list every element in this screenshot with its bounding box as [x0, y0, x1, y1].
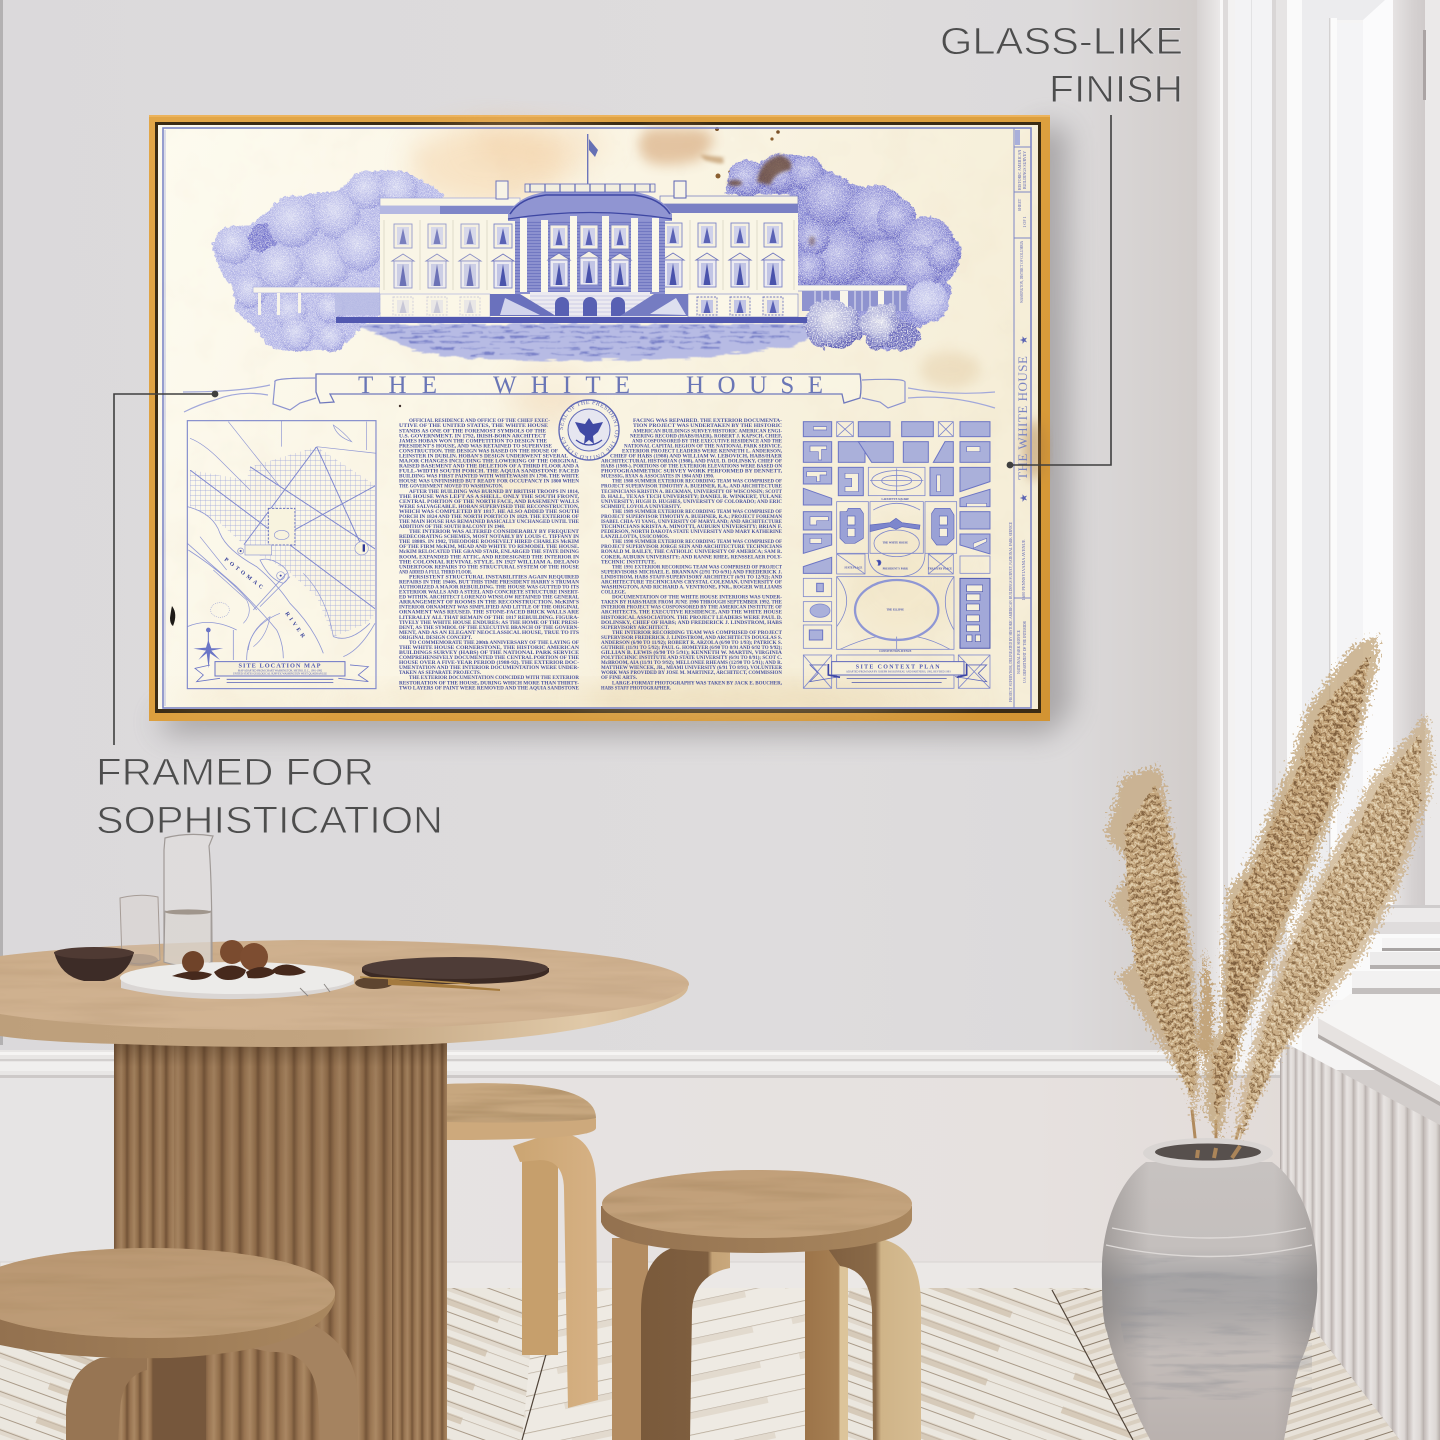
plan labels — [844, 498, 952, 653]
plan labels: THE ELLIPSE — [887, 609, 904, 612]
block cutouts — [807, 427, 987, 548]
body text, left column: AFTER THE BUILDING WAS BURNED BY BRITISH TROOPS IN 1814, — [409, 490, 580, 495]
body text, right column: ISABEL CHIA-YI YANG, UNIVERSITY OF MARYLAND; AND ARCHITECTURE — [601, 520, 783, 525]
dark wooden bowl — [54, 947, 134, 981]
title text — [358, 372, 823, 399]
body text, left column: RAISED BASEMENT AND THE DELETION OF A THIRD FLOOR AND A — [399, 465, 580, 470]
body text, right column: HISTORICAL ASSOCIATION. THE PROJECT LEADERS WERE PAUL D. — [601, 616, 782, 621]
body text, left column: JAMES HOBAN WON THE COMPETITION TO DESIGN THE — [399, 439, 548, 444]
map title ribbon: SITE LOCATION MAP — [238, 662, 321, 669]
lower wall panel — [0, 1078, 1290, 1290]
body text, right column: EXTERIOR PROJECT LEADERS WERE KENNETH L. ANDERSON, — [622, 449, 783, 454]
body text, left column: TAKEN AS SEPARATE PROJECTS. — [399, 671, 481, 676]
fluted pedestal — [114, 1030, 447, 1440]
callout label right: GLASS-LIKE — [940, 21, 1183, 63]
body text, right column: PROJECT SUPERVISOR TIMOTHY A. BUEHNER, R.A.; PROJECT FOREMAN — [601, 515, 782, 520]
river labels — [223, 557, 307, 642]
callout label left: FRAMED FOR — [96, 752, 374, 794]
star below name: ★ — [1019, 493, 1030, 502]
body text, left column: STANDS AS ONE OF THE FOREMOST SYMBOLS OF THE — [399, 429, 547, 434]
body text, left column: HOUSE WAS UNFINISHED BUT READY FOR OCCUPANCY IN 1800 WHEN — [399, 480, 579, 485]
river labels: RIVER — [283, 611, 307, 642]
portico staircases — [490, 294, 688, 316]
body text, left column: HOUSE OVER A FIVE-YEAR PERIOD (1988-92). THE EXTERIOR DOC- — [399, 661, 579, 666]
left stool left leg — [66, 1356, 147, 1440]
sheet number block: BUILDINGS SURVEY — [1022, 151, 1027, 189]
potomac river banks — [187, 507, 375, 660]
body text, right column: GUTHRIE (11/91 TO 5/92); PAUL G. HOMEYER (6/90 TO 8/91 AND 6/92 TO 9/92); — [601, 646, 782, 651]
window and trim — [1197, 0, 1440, 1070]
body text, left column: U.S. GOVERNMENT. IN 1792, IRISH-BORN ARCHITECT — [399, 434, 547, 439]
left stool centre leg — [153, 1350, 206, 1440]
body text, right column: UNIVERSITY; HUGH D. HUGHES, UNIVERSITY OF COLORADO; AND ERIC — [601, 500, 782, 505]
body text, right column: PEDERSON, NORTH DAKOTA STATE UNIVERSITY AND MARY KATHERINE — [601, 530, 783, 535]
leader line right — [1010, 115, 1111, 465]
body text, left column: EXTERIOR WALLS AND A STEEL AND CONCRETE STRUCTURE INSERT- — [399, 591, 579, 596]
baseboard — [0, 1262, 1130, 1290]
radiator — [1280, 1030, 1440, 1440]
body text, left column: THE COLONIAL REVIVAL STYLE. IN 1927 WILLIAM A. DELANO — [399, 560, 579, 565]
body text, left column: ORNAMENT WAS REUSED. THE STONE-FACED BRICK WALLS ARE — [399, 611, 580, 616]
body text, right column: THE 1991 EXTERIOR RECORDING TEAM WAS COMPRISED OF PROJECT — [612, 565, 783, 570]
body text, left column: PRESIDENT'S HOUSE, AND WAS RETAINED TO SUPERVISE — [399, 444, 553, 449]
vertical title block strip — [1009, 130, 1031, 702]
back stool — [447, 1083, 598, 1408]
vertical name: THE WHITE HOUSE — [1015, 356, 1030, 480]
body text, right column: GILLIAN B. LEWIS (6/90 TO 5/91); KENNETH W. MARTIN, VIRGINIA — [601, 651, 783, 656]
body text, right column: PROJECT SUPERVISOR TIMOTHY A. BUEHNER, R.A., AND ARCHITECTURE — [601, 485, 783, 490]
body text, left column: UMENTATION AND THE INTERIOR DOCUMENTATION WERE UNDER- — [399, 666, 579, 671]
leader dot right — [1007, 462, 1013, 468]
plume right wisps — [1233, 714, 1433, 1154]
plan labels: THE WHITE HOUSE — [883, 542, 908, 545]
body text, right column: RONALD M. BAILEY, THE CATHOLIC UNIVERSITY OF AMERICA; SAM R. — [601, 550, 782, 555]
body text, left column: AUTHORIZED A MAJOR REBUILDING. THE HOUSE WAS GUTTED TO ITS — [399, 586, 579, 590]
body text, left column: FULL-WIDTH SOUTH PORCH. THE AQUIA SANDSTONE FACED — [399, 470, 580, 475]
body text, left column: OF THE FIRM McKIM, MEAD AND WHITE TO REMODEL THE HOUSE. — [399, 545, 579, 550]
body text, left column: DENT, AS THE SYMBOL OF THE EXECUTIVE BRANCH OF THE GOVERN- — [399, 626, 579, 631]
dark serving plate — [362, 957, 549, 984]
title text: HOUSE — [686, 372, 823, 399]
body text, right column: THE 1989 SUMMER EXTERIOR RECORDING TEAM WAS COMPRISED OF — [612, 510, 782, 515]
nuts on the plate — [172, 940, 306, 980]
street grid — [190, 446, 375, 636]
plan labels: TREASURY PLACE — [928, 567, 952, 570]
chair rail — [0, 1050, 1290, 1078]
body text, right column: ARCHITECTS, THE EXECUTIVE RESIDENCE, AND THE WHITE HOUSE — [601, 611, 783, 616]
callout label left — [96, 752, 443, 842]
body text, right column: CHIEF OF HABS (1988) AND WILLIAM W. LEBOVICH, HABS/HAER — [610, 454, 783, 460]
delineators credit: PROJECT SUPERVISOR, DELINEATED BY HISTORIC AMERICAN BUILDINGS SURVEY, NATIONAL PARK SERVICE — [1009, 521, 1014, 702]
vase body — [1102, 1162, 1317, 1440]
river labels: POTOMAC — [223, 557, 266, 593]
right colonnade — [797, 285, 907, 311]
body text, left column: TO COMMEMORATE THE 200th ANNIVERSARY OF THE LAYING OF — [409, 641, 579, 646]
plan labels: PRESIDENT'S PARK — [883, 567, 909, 570]
body text, right column: THE 1988 SUMMER EXTERIOR RECORDING TEAM WAS COMPRISED OF — [612, 480, 782, 485]
body text, left column: LITERALLY ALL THAT REMAIN OF THE 1817 REBUILDING. FIGURA- — [399, 616, 579, 621]
body text, left column: TWO LAYERS OF PAINT WERE REMOVED AND THE AQUIA SANDSTONE — [399, 686, 580, 691]
plan title ribbon: ADAPTED FROM MAP BY JOSEPH PASSONNEAU AND PARTNERS, 1992, REVISED 1993 — [846, 670, 951, 673]
city blocks — [803, 422, 990, 640]
body text, left column: RESTORATION OF THE HOUSE, DURING WHICH MORE THAN THIRTY- — [399, 681, 579, 686]
gold frame — [149, 115, 1050, 721]
body text, right column: HABS STAFF PHOTOGRAPHER. — [601, 686, 671, 691]
left colonnade — [253, 287, 380, 315]
base terrace band — [336, 317, 807, 323]
body text, left column: ROOM, EXPANDED THE ATTIC, AND REDESIGNED THE INTERIOR IN — [399, 555, 580, 560]
body text, right column: WORK WAS PROVIDED BY JOSE M. MARTINEZ, ARCHITECT, COMMISSION — [601, 671, 782, 676]
body text, left column: PORCH IN 1824 AND THE NORTH PORTICO IN 1829. THE EXTERIOR OF — [399, 515, 579, 520]
plume left wisps — [1105, 766, 1200, 1123]
body text, left column: CENTRAL PORTION OF THE NORTH FACE, AND BASEMENT WALLS — [399, 500, 579, 505]
wooden herringbone floor — [0, 1288, 1440, 1440]
body text, right column: TAKEN BY HABS/HAER FROM JUNE 1990 THROUGH SEPTEMBER 1992. THE — [601, 601, 783, 606]
outlined parks and streets — [803, 422, 990, 688]
body text, left column: ED WITHIN. ARCHITECT LORENZO WINSLOW RETAINED THE GENERAL — [399, 596, 580, 601]
leader dot left — [212, 391, 218, 397]
vase rim — [1143, 1138, 1273, 1168]
window ledge and books — [1302, 905, 1440, 1000]
body text, left column: OFFICIAL RESIDENCE AND OFFICE OF THE CHIEF EXEC- — [409, 419, 550, 424]
body text, left column: CONSTRUCTION. THE DESIGN WAS BASED ON THE HOUSE OF — [399, 449, 558, 454]
right stool back legs — [612, 1238, 848, 1440]
central south portico — [508, 184, 672, 318]
body text, right column: INTERIOR PROJECT WAS COSPONSORED BY THE AMERICAN INSTITUTE OF — [601, 606, 782, 611]
body text, left column: MENT, AND AS AN ELEGANT NEOCLASSICAL HOUSE, TRUE TO ITS — [399, 631, 579, 636]
body text, left column: THE WHITE HOUSE CORNERSTONE, THE HISTORIC AMERICAN — [399, 646, 580, 651]
body text, left column: THE INTERIOR WAS ALTERED CONSIDERABLY BY FREQUENT — [409, 530, 580, 535]
pampas grass — [1105, 636, 1433, 1155]
body text, right column: SCHMIDT, LOYOLA UNIVERSITY. — [601, 505, 681, 510]
table surface — [0, 940, 689, 1030]
body text, right column: TECHNICIANS KRISTIN A. BECKMAN, UNIVERSITY OF WISCONSIN; SCOTT — [601, 490, 783, 495]
lawn — [352, 324, 842, 360]
body text, right column — [601, 419, 783, 691]
body text, left column: ARRANGEMENT OF ROOMS IN THE RECONSTRUCTION. McKIM'S — [399, 601, 579, 606]
leader line left — [114, 394, 215, 745]
body text, left column: UNDERTOOK REPAIRS TO THE STRUCTURAL SYSTEM OF THE HOUSE — [399, 565, 580, 570]
pampas stems — [1192, 1110, 1240, 1155]
upper diagonals — [190, 420, 377, 490]
body text, left column: BUILDINGS SURVEY (HABS) OF THE NATIONAL PARK SERVICE — [399, 651, 580, 656]
right wing facade — [660, 181, 798, 317]
table edge — [0, 984, 688, 1047]
plan title ribbon: SITE CONTEXT PLAN — [856, 664, 941, 670]
body text, right column: SUPERVISORY ARCHITECT. — [601, 626, 669, 631]
left wing facade — [380, 181, 520, 317]
plume left — [1125, 785, 1197, 1100]
site location map — [183, 420, 380, 689]
body text, right column: PROJECT SUPERVISOR JORGE SEIN AND ARCHITECTURE TECHNICIANS — [601, 545, 782, 550]
body text, right column: MUESSIG, RYAN & ASSOCIATES IN 1984 AND 1990. — [601, 475, 714, 480]
glass carafe with water — [164, 834, 213, 966]
left stool right leg — [241, 1318, 358, 1440]
body text, left column: WERE SALVAGEABLE. HOBAN SUPERVISED THE RECONSTRUCTION, — [399, 505, 580, 510]
district text: WASHINGTON, DISTRICT OF COLUMBIA — [1019, 241, 1025, 303]
star above name: ★ — [1019, 335, 1030, 344]
window sill — [1318, 994, 1440, 1106]
marble plate — [120, 962, 354, 999]
body text, right column: THE INTERIOR RECORDING TEAM WAS COMPRISED OF PROJECT — [612, 631, 783, 636]
body text, left column: ADDITION OF THE SOUTH BALCONY IN 1948. — [399, 525, 505, 530]
right bushes — [804, 300, 919, 350]
body text, left column: THE 1880S. IN 1902, THEODORE ROOSEVELT HIRED CHARLES McKIM — [399, 540, 579, 545]
body text, right column: DOCUMENTATION OF THE WHITE HOUSE INTERIORS WAS UNDER- — [612, 596, 782, 601]
sheet number block: SHEET — [1017, 198, 1022, 211]
body text, left column: BUILDING WAS FIRST PAINTED WITH WHITEWASH IN 1798. THE WHITE — [399, 475, 580, 480]
body text, left column: THE HOUSE WAS LEFT AS A SHELL. ONLY THE SOUTH FRONT, — [399, 495, 580, 500]
right stool front right leg — [826, 1240, 921, 1440]
callout label left: SOPHISTICATION — [96, 800, 443, 842]
body text, left column: McKIM RELOCATED THE GRAND STAIR, ENLARGED THE STATE DINING — [399, 550, 579, 555]
body text, right column: LARGE-FORMAT PHOTOGRAPHY WAS TAKEN BY JACK E. BOUCHER, — [612, 681, 783, 686]
title ribbon — [183, 372, 995, 412]
paper sheet — [158, 123, 1046, 716]
plan labels: CONSTITUTION AVENUE — [879, 650, 912, 653]
body text, left column: LEINSTER IN DUBLIN. HOBAN'S DESIGN UNDERWENT SEVERAL — [399, 454, 569, 460]
sheet number block: HISTORIC AMERICAN — [1017, 150, 1022, 190]
body text, right column: SUPERVISORS MICHAEL E. BRANNAN (2/91 TO 6/91) AND FREDERICK J. — [601, 570, 782, 575]
flag and pole — [587, 134, 598, 184]
plume right — [1240, 735, 1420, 1140]
framed print — [149, 110, 1052, 721]
body text, right column: AMERICAN BUILDINGS SURVEY/HISTORIC AMERICAN ENGI- — [633, 429, 782, 434]
rust stain on right tree — [728, 155, 815, 246]
body text, right column: PHOTOGRAMMETRIC SURVEY WORK PERFORMED BY DENNETT, — [601, 470, 783, 475]
left stool seat — [0, 1290, 335, 1358]
callout label right: FINISH — [1049, 69, 1183, 111]
body text, right column: MATTHEW WIENCEK, JR., MIAMI UNIVERSITY (6/91 TO 8/91). VOLUNTEER — [601, 666, 782, 671]
left trees — [212, 170, 443, 352]
address: 1600 PENNSYLVANIA AVENUE — [1021, 539, 1026, 600]
dark inner gap — [155, 122, 1041, 713]
body text, right column: OF FINE ARTS. — [601, 676, 637, 681]
trim bands — [1197, 0, 1302, 1050]
callout: glass-like finish — [940, 21, 1183, 468]
body text, right column: COKER, AUBURN UNIVERSITY; AND RANNE RHEE, RENSSELAER POLY- — [601, 555, 782, 560]
title text: THE — [358, 372, 437, 399]
body text, left column: THE EXTERIOR DOCUMENTATION COINCIDED WITH THE EXTERIOR — [409, 676, 579, 681]
golden spoons — [355, 977, 500, 991]
the ellipse — [855, 580, 938, 640]
plume centre — [1212, 655, 1370, 1120]
body text, right column: TION PROJECT WAS UNDERTAKEN BY THE HISTORIC — [633, 424, 783, 429]
body text, right column: FACING WAS REPAIRED. THE EXTERIOR DOCUMENTA- — [633, 419, 782, 424]
body text, right column: THE 1990 SUMMER EXTERIOR RECORDING TEAM WAS COMPRISED OF — [612, 540, 782, 545]
body text, right column: LANZILLOTTA, US/ICOMOS. — [601, 535, 669, 540]
right stool front left leg — [641, 1246, 730, 1440]
frame drop shadow — [155, 122, 1072, 735]
body text, right column: ANDERSON (6/90 TO 11/92); ROBERT R. ARZOLA (6/90 TO 1/93); PATRICK S. — [601, 641, 782, 646]
parks and white house block — [268, 508, 295, 545]
right building block — [960, 578, 990, 648]
body text, right column: LINDSTROM, HABS STAFF/SUPERVISORY ARCHITECT (6/91 TO 12/92); AND — [601, 575, 782, 580]
callout: framed for sophistication — [96, 391, 443, 842]
front right stool — [601, 1170, 921, 1440]
callout label right — [940, 21, 1183, 111]
back stool seat — [447, 1083, 596, 1140]
body text, right column: McBROOM, AIA (11/91 TO 9/92); MELLONEE RHEAMS (12/90 TO 5/91); AND R. — [601, 661, 782, 666]
body text, right column: AND COSPONSORED BY THE EXECUTIVE RESIDENCE AND THE — [632, 439, 783, 444]
body text, left column: UTIVE OF THE UNITED STATES, THE WHITE HOUSE — [399, 424, 549, 429]
body text, right column: ARCHITECTURAL HISTORIAN (1988), AND PAUL D. DOLINSKY, CHIEF OF — [601, 460, 782, 464]
body text, left column: THE GOVERNMENT MOVED TO WASHINGTON. — [399, 485, 503, 490]
body text, right column: NATIONAL CAPITAL REGION OF THE NATIONAL PARK SERVICE. — [624, 444, 782, 449]
small credits: NATIONAL PARK SERVICE — [1017, 629, 1021, 674]
body text, left column — [399, 419, 580, 691]
plume small centre — [1197, 950, 1213, 1058]
glass tumbler — [120, 895, 160, 966]
table top — [0, 940, 689, 1047]
body text, right column: ARCHITECTURE TECHNICIANS CRYSTAL COLEMAN, UNIVERSITY OF — [601, 580, 782, 586]
plan labels: LAFAYETTE SQUARE — [882, 498, 909, 501]
right trees — [725, 153, 962, 352]
back stool legs — [513, 1133, 598, 1408]
plume centre wisps — [1203, 636, 1378, 1138]
vertical title block strip: U.S. DEPARTMENT OF THE INTERIOR — [1023, 620, 1027, 683]
body text, right column: D. HALL, TEXAS TECH UNIVERSITY; DANIEL R. WINKERT, TULANE — [601, 495, 783, 500]
compass star — [193, 628, 223, 668]
plan labels: STATE PLACE — [844, 566, 863, 569]
front left stool — [0, 1248, 358, 1440]
window panes — [1302, 0, 1440, 1000]
body text, right column: POLYTECHNIC INSTITUTE AND STATE UNIVERSITY (6/91 TO 8/91); SCOT C. — [601, 656, 782, 661]
body text, left column: THE MAIN HOUSE HAS REMAINED BASICALLY UNCHANGED UNTIL THE — [399, 520, 580, 525]
presidential seal: SEAL OF THE PRESIDENT OF THE UNITED STATES — [560, 400, 618, 460]
title text: WHITE — [493, 372, 630, 399]
body text, right column: DOLINSKY, CHIEF OF HABS; AND FREDERICK J. LINDSTROM, HABS — [601, 621, 782, 626]
blueprint border lines — [163, 128, 1031, 708]
body text, left column: AND ADDED A FULL THIRD FLOOR. — [399, 570, 472, 575]
plan title ribbon — [810, 662, 987, 683]
body text, right column: TECHNICIANS KRISTA A. MINOTTI, AUBURN UNIVERSITY; BRIAN F. — [601, 525, 782, 530]
map title ribbon: MAP ADAPTED FROM CHART WASHINGTON, METRO. D.C., 1991-1992 — [238, 669, 323, 672]
sheet number block — [1017, 150, 1027, 228]
body text, left column: COMPREHENSIVELY DOCUMENTED THE CENTRAL PORTION OF THE — [399, 656, 580, 661]
map title ribbon — [195, 662, 368, 683]
map title ribbon: UNITED STATES GEOLOGICAL SURVEY, WASHINGTON WEST QUADRANGLE — [233, 672, 327, 675]
paper stains — [170, 123, 1046, 716]
stone vase — [1102, 1138, 1317, 1440]
body text, right column: WASHINGTON, AND RICHARD A. VENTRONE, FNR., ROGER WILLIAMS — [601, 586, 782, 590]
body text, right column: SUPERVISOR FREDERICK J. LINDSTROM, AND ARCHITECTS DOUGLAS S. — [601, 636, 782, 641]
body text, right column: NEERING RECORD (HABS/HAER), ROBERT J. KAPSCH, CHIEF, — [630, 434, 783, 439]
engraving of the white house — [212, 134, 962, 360]
white house outline — [840, 508, 954, 565]
body text, left column: REPAIRS IN THE 1940S, BUT THIS TIME PRESIDENT HARRY S TRUMAN — [399, 580, 579, 586]
site context plan — [803, 422, 990, 688]
body text, left column: REDECORATING SCHEMES, MOST NOTABLY BY LOUIS C. TIFFANY IN — [399, 535, 579, 540]
body text, left column: WHICH WAS COMPLETED BY 1817. HE ALSO ADDED THE SOUTH — [399, 510, 579, 515]
body text, left column: TIVELY THE WHITE HOUSE ENDURES: AS THE HOME OF THE PRESI- — [399, 621, 579, 626]
sheet number block: 1 OF 1 — [1022, 216, 1027, 228]
right stool seat — [601, 1206, 912, 1253]
body text, right column: HABS (1989-). PORTIONS OF THE EXTERIOR ELEVATIONS WERE BASED ON — [601, 465, 782, 470]
body text, left column: PERSISTENT STRUCTURAL INSTABILITIES AGAIN REQUIRED — [409, 575, 580, 580]
body text, left column: MAJOR CHANGES INCLUDING THE LOWERING OF THE ORIGINAL — [399, 460, 579, 464]
body text, right column: TECHNIC INSTITUTE. — [601, 560, 656, 565]
body text, left column: ORIGINAL DESIGN CONCEPT. — [399, 636, 472, 641]
body text, left column: INTERIOR ORNAMENT WAS SIMPLIFIED AND LITTLE OF THE ORIGINAL — [399, 606, 580, 611]
body text, right column: COLLEGE. — [601, 591, 626, 596]
